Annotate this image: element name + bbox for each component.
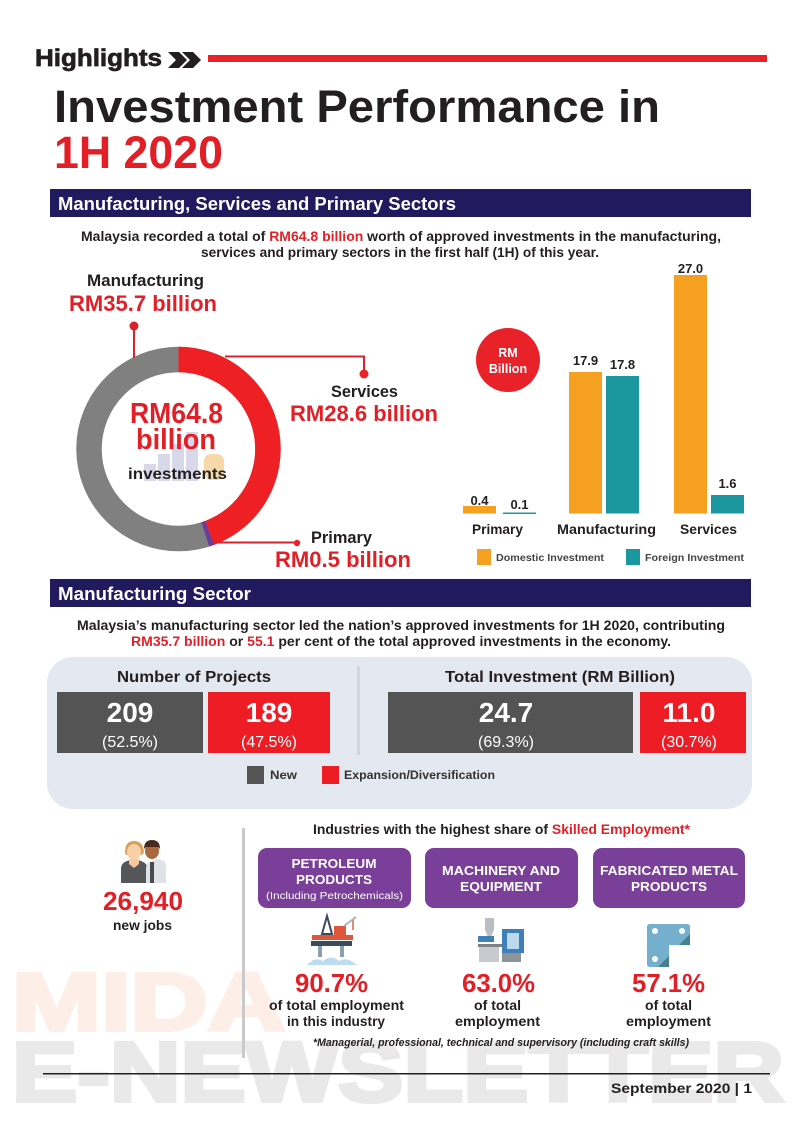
title: Investment Performance in: [54, 81, 660, 132]
intro text: sectors: services and primary sectors in the first half (1H) of this year.: [201, 245, 599, 260]
highlights header: [35, 45, 767, 72]
total investment: 24.7: [479, 697, 533, 728]
section heading: manufacturing: Manufacturing Sector: [58, 584, 251, 604]
bars: manufacturing: [557, 353, 656, 537]
watermark: E-NEWSLETTER: [12, 1025, 784, 1119]
intro text: sectors: Malaysia recorded a total of RM64.8 billion worth of approved investments in the manufacturing,: [81, 229, 721, 244]
unit badge: [476, 328, 540, 392]
industry: machinery: EQUIPMENT: [460, 879, 542, 894]
centre total: investments: [128, 466, 227, 483]
callout: manufacturing: Manufacturing: [87, 272, 204, 290]
callout: services: RM28.6 billion: [290, 401, 438, 426]
legend: [247, 766, 495, 784]
bars: primary: 0.4: [470, 493, 489, 508]
section heading: sectors: Manufacturing, Services and Primary Sectors: [58, 194, 456, 214]
section heading: manufacturing: [50, 579, 751, 607]
title: [54, 81, 660, 178]
intro text: sectors: [81, 229, 721, 260]
industry: fabricated metal: employment: [626, 1013, 711, 1029]
callout: primary: [216, 529, 411, 572]
bars: primary: 0.1: [510, 497, 529, 512]
industry: petroleum: 90.7%: [295, 968, 368, 998]
bar chart: [463, 261, 745, 565]
industry: petroleum: PETROLEUM: [292, 856, 376, 871]
number of projects: 209: [107, 697, 153, 728]
industry: fabricated metal: FABRICATED METAL: [600, 863, 738, 878]
icon: metal plate: [647, 924, 690, 967]
legend: Expansion/Diversification: [344, 770, 495, 782]
footnote: *Managerial, professional, technical and supervisory (including craft skills): [313, 1037, 689, 1049]
unit badge: Billion: [489, 362, 527, 376]
highlights header: Highlights: [35, 45, 162, 72]
footer date: September 2020 | 1: [611, 1081, 753, 1096]
bars: primary: [463, 493, 536, 537]
intro text: manufacturing: Malaysia’s manufacturing sector led the nation’s approved investments for 1H 2020, contributing: [77, 618, 725, 633]
icon: workers: [121, 840, 166, 883]
bars: primary: Primary: [472, 521, 523, 537]
title: 1H 2020: [54, 127, 223, 178]
new jobs: 26,940: [103, 886, 183, 916]
legend: New: [270, 770, 297, 782]
unit badge: RM: [498, 346, 518, 360]
icon: machine: [478, 918, 524, 962]
number of projects: [57, 669, 330, 753]
watermark: MIDA: [12, 957, 285, 1048]
icon: oil rig: [307, 916, 357, 965]
industry: fabricated metal: 57.1%: [632, 968, 705, 998]
industry: fabricated metal: PRODUCTS: [631, 879, 707, 894]
panel: projects and investment: [47, 657, 752, 809]
watermark: [12, 957, 784, 1119]
new jobs: new jobs: [113, 917, 172, 933]
industry: petroleum: PRODUCTS: [296, 872, 372, 887]
centre total: RM64.8: [130, 398, 223, 430]
industry: machinery: employment: [455, 1013, 540, 1029]
industry: machinery: 63.0%: [462, 968, 535, 998]
total investment: [388, 669, 746, 753]
bars: services: 1.6: [718, 476, 737, 491]
number of projects: (52.5%): [102, 734, 158, 751]
intro text: manufacturing: [77, 618, 725, 649]
new jobs: [103, 840, 183, 933]
industry: fabricated metal: of total: [645, 997, 692, 1013]
callout: manufacturing: [69, 272, 217, 358]
industry: fabricated metal: [593, 848, 745, 1029]
industry: petroleum: of total employment: [269, 997, 404, 1013]
callout: primary: RM0.5 billion: [275, 547, 411, 572]
skilled employment heading: Industries with the highest share of Skilled Employment *: [313, 822, 691, 837]
bars: services: [674, 261, 744, 537]
total investment: (30.7%): [661, 734, 717, 751]
callout: services: Services: [331, 383, 398, 401]
industry: machinery: [425, 848, 578, 1029]
bars: manufacturing: Manufacturing: [557, 521, 656, 537]
industry: petroleum: in this industry: [287, 1013, 385, 1029]
bar legend: [477, 549, 745, 565]
total investment: 11.0: [663, 697, 715, 728]
bar legend: Foreign Investment: [645, 552, 745, 564]
number of projects: 189: [246, 697, 292, 728]
industry: petroleum: (Including Petrochemicals): [266, 890, 403, 902]
centre total: [128, 398, 227, 483]
callout: primary: Primary: [311, 529, 373, 547]
bars: services: 27.0: [678, 261, 703, 276]
bar legend: Domestic Investment: [496, 552, 605, 564]
centre total: billion: [136, 424, 216, 456]
donut chart: [89, 360, 268, 538]
industry: machinery: MACHINERY AND: [442, 863, 560, 878]
callout: services: [225, 356, 438, 426]
total investment: (69.3%): [478, 734, 534, 751]
bars: services: Services: [680, 521, 737, 537]
industry: machinery: of total: [474, 997, 521, 1013]
section heading: sectors: [50, 189, 751, 217]
total investment: Total Investment (RM Billion): [445, 669, 675, 686]
bars: manufacturing: 17.8: [610, 357, 635, 372]
centre bars and coins icon: [144, 432, 224, 481]
bars: manufacturing: 17.9: [573, 353, 598, 368]
number of projects: Number of Projects: [117, 669, 271, 686]
intro text: manufacturing: RM35.7 billion or 55.1 per cent of the total approved investments in the economy.: [131, 634, 671, 649]
number of projects: (47.5%): [241, 734, 297, 751]
callout: manufacturing: RM35.7 billion: [69, 291, 217, 316]
industry: petroleum: [258, 848, 411, 1029]
